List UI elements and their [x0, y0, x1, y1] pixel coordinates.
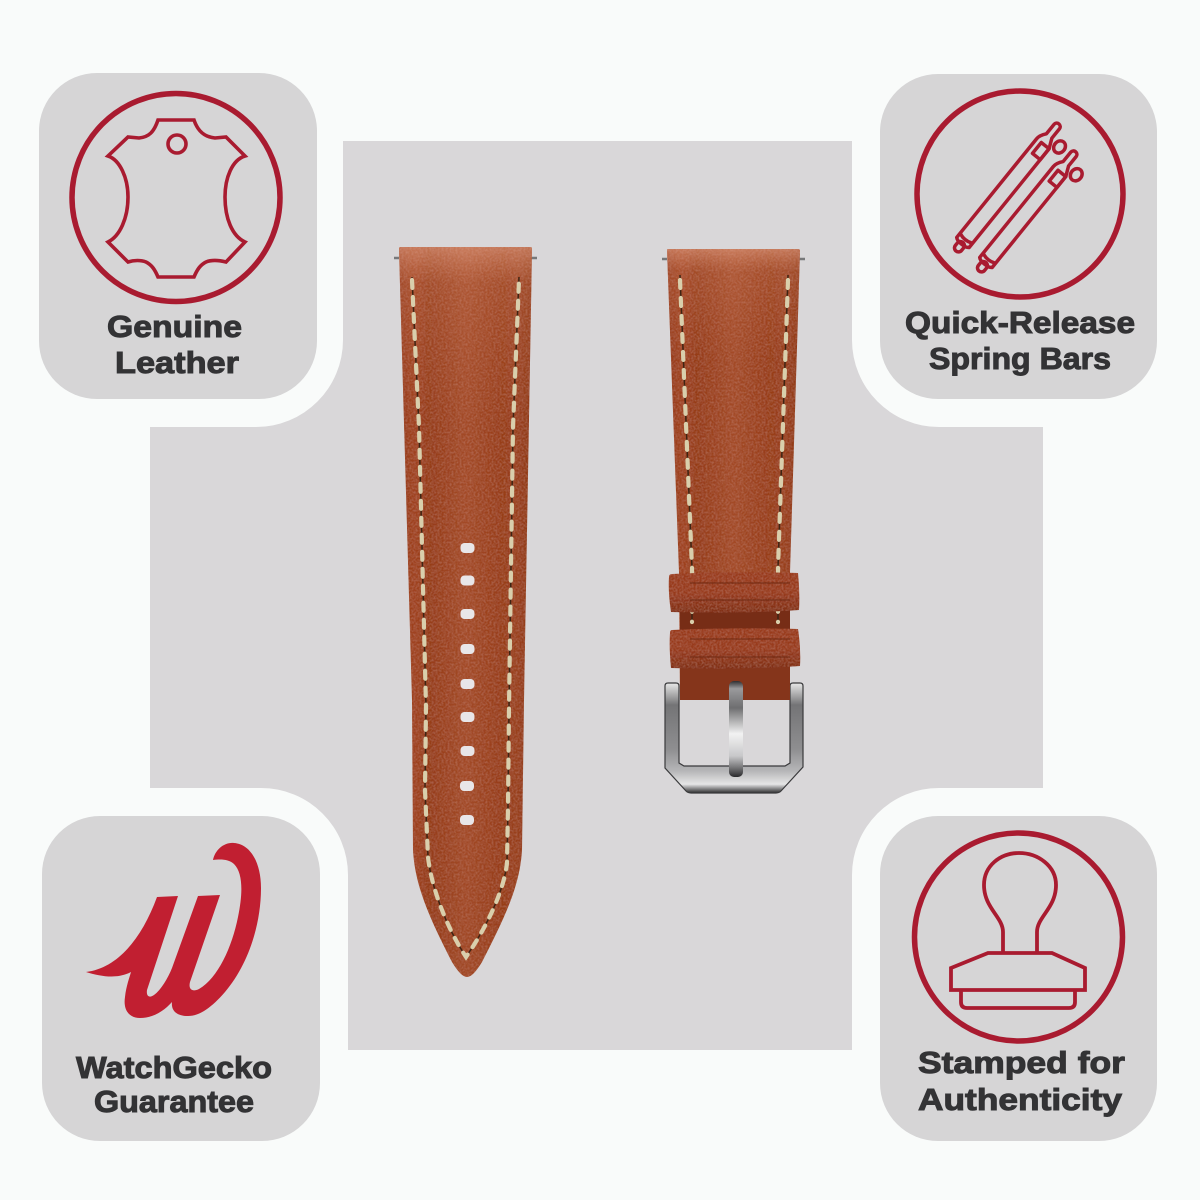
- icon: watchgecko W logo: [86, 843, 261, 1018]
- buckle frame: [665, 683, 803, 793]
- heading: quick-release spring bars: Spring Bars: [929, 341, 1111, 376]
- heading: genuine leather: Genuine: [107, 309, 242, 344]
- short strap leather body: [667, 249, 800, 700]
- icon: leather hide: [72, 94, 280, 302]
- short strap stitching: [680, 275, 788, 622]
- long strap leather body: [399, 247, 532, 977]
- keeper loop lower: [670, 628, 800, 669]
- icon: stamp: [914, 833, 1122, 1041]
- long strap buckle holes: [460, 543, 474, 825]
- panel: stamped for authenticity: [880, 816, 1157, 1141]
- panel: quick-release spring bars: [880, 74, 1157, 399]
- heading: stamped for authenticity: Stamped for: [918, 1045, 1125, 1080]
- heading: watchgecko guarantee: Guarantee: [94, 1084, 254, 1119]
- short strap piece with buckle: [662, 249, 805, 793]
- long strap stitching: [412, 277, 519, 957]
- heading: stamped for authenticity: [918, 1045, 1125, 1117]
- heading: quick-release spring bars: [905, 305, 1135, 376]
- heading: genuine leather: [107, 309, 242, 380]
- buckle tongue: [729, 681, 743, 777]
- heading: watchgecko guarantee: WatchGecko: [76, 1050, 272, 1085]
- heading: watchgecko guarantee: [76, 1050, 272, 1119]
- long strap piece: [394, 247, 537, 977]
- icon: spring bars: [917, 91, 1123, 297]
- keeper loop upper: [669, 572, 799, 613]
- panel: genuine leather: [39, 73, 317, 399]
- panel: watchgecko guarantee: [42, 816, 320, 1141]
- heading: quick-release spring bars: Quick-Release: [905, 305, 1135, 340]
- heading: stamped for authenticity: Authenticity: [918, 1082, 1123, 1117]
- central grey backdrop: [150, 141, 1043, 1050]
- heading: genuine leather: Leather: [115, 345, 239, 380]
